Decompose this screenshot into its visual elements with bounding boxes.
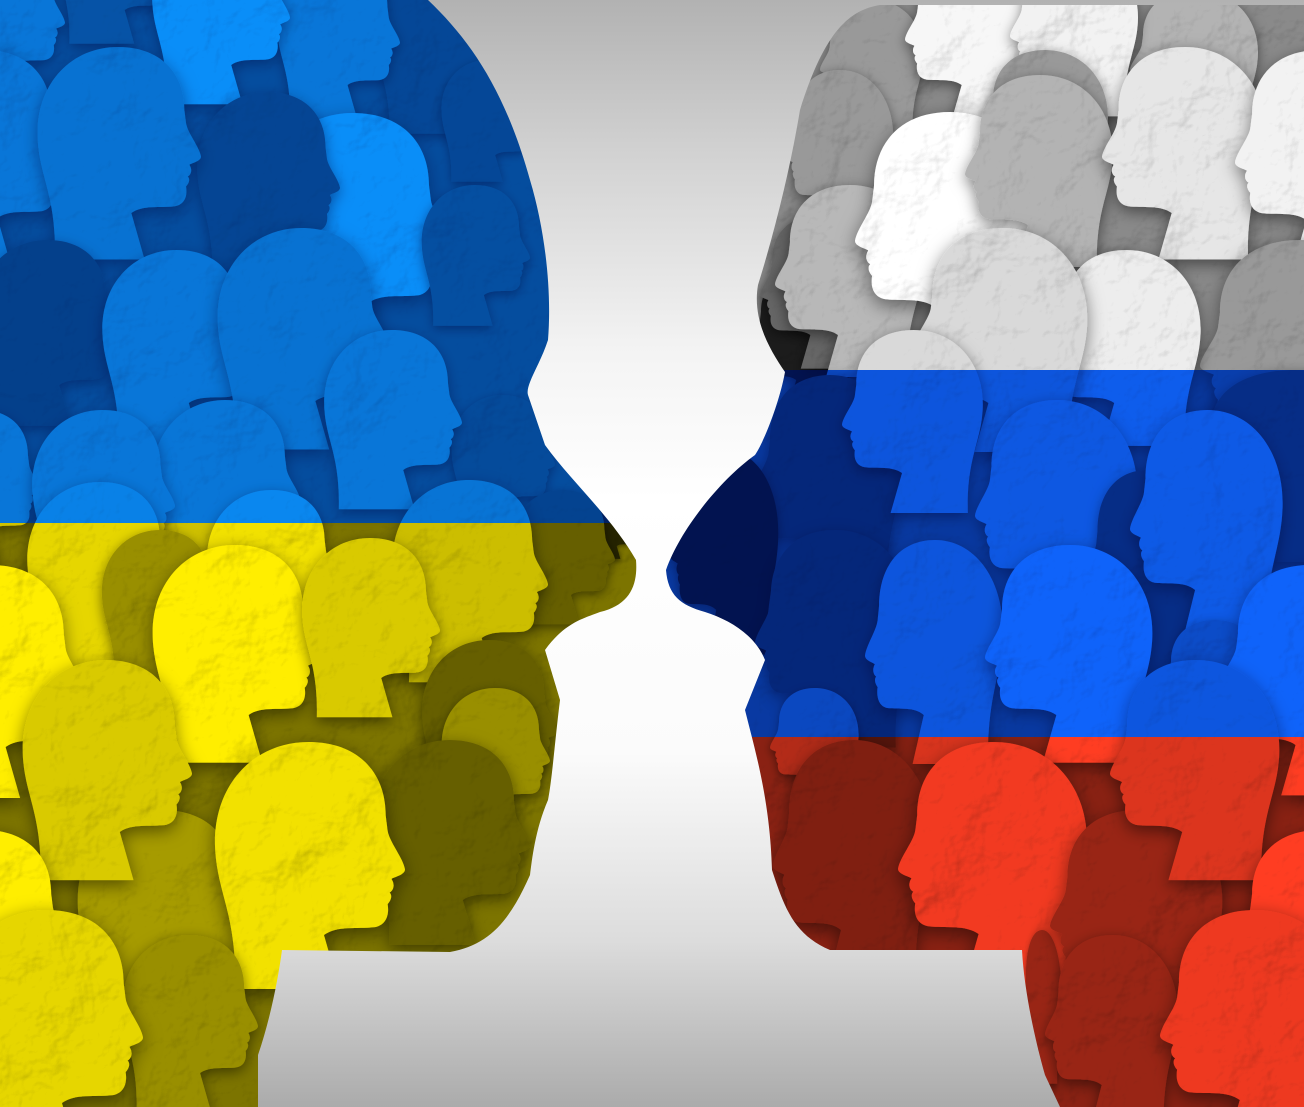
left silhouette: Ukraine crowd face [0,0,660,1107]
blue lift right [650,370,1304,737]
paper heads left [0,0,636,1107]
paper texture left [0,0,660,1107]
flag bands left: blue and yellow [0,0,660,1107]
blue lift left [0,0,660,523]
flag bands right: white, blue and red [666,370,1304,1107]
right silhouette: Russia crowd face [650,0,1304,1107]
paper texture right [758,5,1304,1107]
paper heads right [670,0,1304,1107]
